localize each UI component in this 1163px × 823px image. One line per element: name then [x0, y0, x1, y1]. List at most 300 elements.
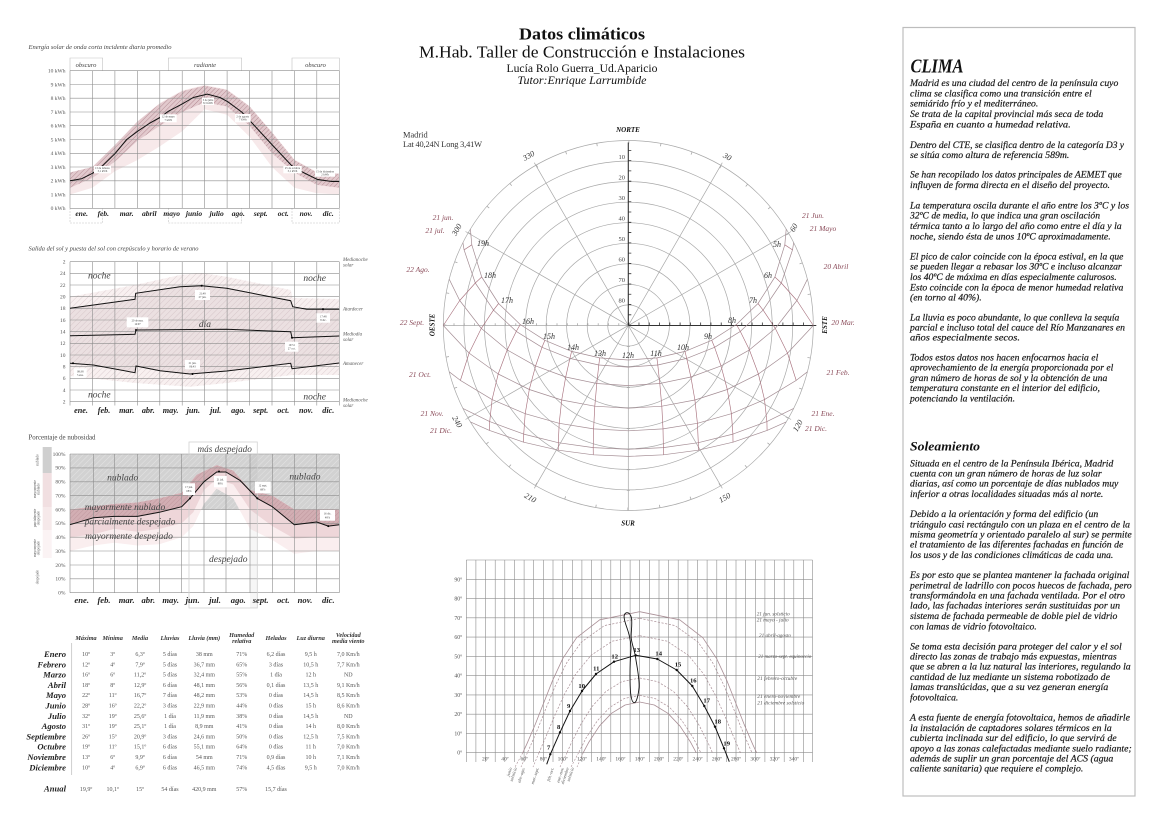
table header: Heladas: [265, 635, 287, 642]
table rows: 11 h: [306, 745, 316, 751]
text block: soleamiento: lamas translúcidas, que a su vez generan energía: [910, 682, 1109, 693]
right side labels: Medianoche: [342, 258, 368, 263]
month labels: nov.: [298, 595, 312, 605]
table rows: 19º: [109, 724, 117, 730]
region labels: mayormente despejado: [85, 532, 173, 542]
date labels: 21 Dic.: [430, 426, 452, 435]
month labels: may.: [163, 406, 179, 415]
north and east axes: [628, 142, 816, 326]
y axis labels: 40%: [55, 535, 66, 541]
table rows: 7,0 Km/h: [337, 745, 360, 751]
annual row: 15,7 días: [265, 787, 287, 793]
callouts: energy values: 3,1 kWh: [288, 170, 298, 173]
right side labels: Amanecer: [342, 362, 363, 367]
callouts: energy values: 7 kWh: [165, 119, 173, 122]
hour numbers: 10: [578, 683, 586, 690]
cloud legend bar: mayormente: [33, 480, 37, 498]
callouts: cloud percentages: 12 sept.: [258, 484, 267, 488]
altitude scale labels: 30: [618, 195, 625, 202]
date labels: [400, 211, 855, 435]
altitude labels: 20º: [454, 712, 462, 718]
cloud legend bar: [33, 447, 52, 584]
right side labels: solar: [343, 338, 353, 343]
table rows: 8º: [110, 683, 115, 689]
table rows: 16º: [109, 704, 117, 710]
table header: relativa: [232, 638, 251, 645]
rotated curve labels: diciembre: [560, 767, 570, 785]
azimuth labels: 280º: [731, 756, 741, 762]
table rows: ND: [344, 673, 353, 679]
table rows: 11,2º: [134, 673, 146, 679]
hour numbers: 14: [655, 651, 663, 658]
title block: Datos climáticos: [519, 24, 645, 44]
month labels: abril: [142, 209, 158, 218]
date labels: 22 Ago.: [406, 265, 430, 274]
table rows: 6 días: [163, 755, 178, 761]
text block: clima: se sitúa como altura de referencia 589m.: [910, 150, 1069, 161]
text block: clima: aprovechamiento de la energía proporcionada por el: [910, 363, 1114, 374]
table rows: 50%: [236, 734, 247, 740]
callouts: cloud percentages: 48%: [325, 516, 331, 520]
grid: [466, 560, 812, 762]
cardinal labels: [428, 126, 829, 528]
table rows: 6,3º: [135, 652, 145, 658]
table rows: 15º: [109, 734, 117, 740]
date legend labels: [757, 612, 811, 707]
month labels: jun.: [185, 406, 200, 415]
callouts: energy values: 15 de diciembre: [316, 170, 335, 173]
altitude labels: 50º: [454, 654, 462, 660]
table rows: 71%: [236, 652, 247, 658]
table rows: 6º: [110, 673, 115, 679]
table rows: 12,9º: [134, 683, 146, 689]
table rows: Julio: [47, 711, 66, 721]
table rows: 14 h: [305, 724, 316, 730]
y axis labels: 7 kWh: [51, 110, 66, 116]
table rows: 10 h: [305, 755, 316, 761]
table rows: Abril: [47, 680, 67, 690]
location text: [403, 130, 482, 149]
callouts: times: 06:43: [189, 366, 196, 368]
y axis labels: 5 kWh: [51, 137, 66, 143]
panel border: [903, 28, 1135, 796]
right side labels: [342, 258, 368, 409]
period boxes: obscuro, radiante: radiante: [194, 62, 216, 69]
azimuth labels: 180º: [635, 756, 645, 762]
text block: soleamiento: perimetral de ladrillo con pocos huecos de fachada, pero: [909, 580, 1132, 591]
right side labels: Mediodía: [342, 332, 363, 338]
table rows: 7,7 Km/h: [337, 662, 360, 668]
seasonal altitude curves: [523, 612, 757, 753]
callouts: cloud percentages: 21 jul.: [217, 478, 224, 482]
month labels: jul.: [208, 406, 221, 415]
month labels: oct.: [277, 595, 290, 605]
table rows: 12,5 h: [303, 734, 318, 740]
month labels: [74, 406, 334, 415]
cardinal labels: ESTE: [821, 316, 829, 335]
callouts: cloud percentages: 16 dic.: [324, 512, 332, 516]
text block: soleamiento: cubierta inclinada sur del edificio, lo que servirá de: [910, 733, 1117, 744]
table rows: Junio: [44, 700, 66, 710]
date labels: 20 Mar.: [831, 318, 855, 327]
table rows: 14,5 h: [303, 714, 318, 720]
hour dots: [549, 654, 725, 756]
rotated curve labels: solsticio: [509, 766, 518, 782]
hour labels: 11h: [650, 349, 662, 358]
table rows: 8,9 mm: [195, 724, 214, 730]
altitude labels: 10º: [454, 731, 462, 737]
date legend labels: 21 abril-agosto: [759, 633, 791, 639]
title block: Lucía Rolo Guerra_Ud.Aparicio: [506, 61, 658, 75]
month labels: feb.: [97, 595, 111, 605]
region labels: despejado: [209, 555, 248, 565]
table rows: 1 día: [164, 714, 176, 720]
table rows: 11º: [109, 693, 117, 699]
y axis labels: 10 kWh: [48, 68, 66, 74]
y axis labels: 80%: [55, 480, 66, 486]
altitude labels: 90º: [454, 577, 462, 583]
azimuth labels: 300: [449, 222, 464, 238]
sun path day curves: [443, 229, 813, 456]
azimuth labels: 240: [450, 414, 464, 429]
text block: soleamiento: el tratamiento de las diferentes fachadas en función de: [910, 540, 1124, 551]
y axis labels: 24: [60, 271, 66, 277]
altitude scale labels: 40: [618, 216, 625, 222]
table rows: 53%: [236, 693, 247, 699]
y axis labels: 0 kWh: [51, 206, 66, 212]
panel: text column: [903, 28, 1135, 796]
text block: clima: térmica tanto a lo largo del año como entre el día y la: [910, 221, 1122, 232]
callouts: cloud percentages: 68%: [186, 490, 192, 493]
azimuth labels: 260º: [712, 756, 722, 762]
cloud legend bar: parcialmente: [33, 508, 37, 527]
text block: soleamiento: cantidad de luz mediante un sistema robotizado de: [910, 672, 1111, 683]
annual row: 54 días: [161, 787, 179, 793]
altitude labels: 40º: [454, 674, 462, 680]
table rows: 0 días: [269, 745, 284, 751]
table rows: 8,0 Km/h: [337, 724, 360, 730]
altitude labels: 70º: [454, 616, 462, 622]
text block: clima: La lluvia es poco abundante, lo que conlleva la sequía: [909, 312, 1119, 323]
y axis labels: [60, 260, 66, 406]
cloud legend bar: mayormente: [33, 539, 37, 557]
azimuth labels: 20º: [482, 756, 489, 762]
altitude scale labels: [618, 154, 625, 304]
table rows: 3 días: [163, 734, 178, 740]
panel: climate data table: [26, 632, 365, 794]
date labels: 21 jun.: [433, 213, 454, 222]
callouts: times: 08:38: [77, 370, 84, 373]
table rows: 74%: [236, 765, 247, 771]
location text: Madrid: [403, 130, 428, 140]
date labels: 20 Abril: [824, 262, 848, 271]
text block: soleamiento: [909, 458, 1132, 775]
table rows: 26º: [82, 734, 90, 740]
date labels: 21 jul.: [425, 226, 445, 235]
text block: clima: temperatura constante en el interior del edificio,: [910, 383, 1100, 394]
table rows: 32,4 mm: [194, 673, 215, 679]
azimuth labels: 200º: [654, 756, 664, 762]
altitude scale labels: 10: [618, 154, 625, 161]
text block: clima: parcial e incluso total del cauce del Río Manzanares en: [909, 323, 1125, 334]
y axis labels: 4 kWh: [51, 151, 66, 157]
month labels: dic.: [323, 209, 334, 218]
table rows: 25,6º: [134, 714, 146, 720]
table rows: 0 días: [269, 724, 284, 730]
table rows: 7,9º: [135, 662, 145, 668]
box: mas despejado: [189, 442, 257, 608]
table rows: 3 días: [163, 704, 178, 710]
table header: [74, 632, 365, 645]
cardinal labels: OESTE: [428, 313, 436, 336]
y axis labels: 18: [60, 306, 66, 312]
region labels: [84, 472, 321, 565]
y axis labels: 30%: [55, 549, 66, 555]
curve leader lines: [515, 753, 583, 767]
table rows: 12º: [82, 662, 90, 668]
y axis labels: 2: [63, 260, 66, 266]
y axis labels: 20%: [55, 563, 66, 569]
hour numbers: 8: [557, 724, 561, 731]
annual row: 19,9º: [80, 787, 92, 793]
y axis labels: 100%: [53, 452, 66, 458]
rotated curve labels: junio: [505, 766, 513, 778]
text block: clima: 32ºC de media, lo que indica una gran oscilación: [909, 211, 1100, 222]
text block: clima: Se trata de la capital provincial más seca de toda: [910, 109, 1104, 120]
text block: clima: clima se clasifica como una transición entre el: [910, 88, 1092, 99]
table rows: 38%: [236, 714, 247, 720]
table rows: 10º: [82, 652, 90, 658]
table rows: 54 mm: [196, 755, 213, 761]
azimuth labels: 210: [523, 491, 538, 505]
table rows: Diciembre: [28, 762, 66, 772]
table rows: 7,1 Km/h: [337, 755, 360, 761]
text block: clima: los 40ºC de máxima en días especialmente calurosos.: [910, 272, 1117, 283]
callouts: energy values: 7 kWh: [239, 119, 247, 122]
text block: clima: Se han recopilado los datos principales de AEMET que: [910, 170, 1122, 181]
callouts: times: 10:51: [289, 344, 295, 347]
altitude labels: 60º: [454, 635, 462, 641]
table rows: 5 días: [163, 652, 178, 658]
annual row: 10,1º: [107, 787, 119, 793]
rotated curve labels: ene.-nov.: [555, 767, 565, 783]
table rows: 14,5 h: [303, 693, 318, 699]
chart title: solar energy: Energía solar de onda corta incidente diaria promedio: [27, 45, 172, 51]
table rows: 55%: [236, 673, 247, 679]
table rows: 7,0 Km/h: [337, 652, 360, 658]
text block: soleamiento: misma geometría y orientado paralelo al sur) se permite: [910, 529, 1132, 540]
callouts: times: 14:07: [134, 323, 141, 326]
month labels: feb.: [98, 406, 110, 415]
table rows: 64%: [236, 745, 247, 751]
location text: Lat 40,24N Long 3,41W: [403, 140, 482, 149]
text block: soleamiento: triángulo casi rectángulo con un plaza en el centro de la: [910, 519, 1130, 530]
date labels: 21 Oct.: [409, 370, 431, 379]
text block: clima: (en torno al 40%).: [910, 293, 982, 304]
month labels: ago.: [231, 595, 246, 605]
region labels: noche, dia: [88, 272, 326, 402]
altitude labels: 0º: [457, 751, 462, 757]
text block: clima: gran número de horas de sol y la obtención de una: [910, 373, 1107, 384]
text block: soleamiento: Se toma esta decisión para proteger del calor y el sol: [910, 641, 1122, 652]
y axis labels: 10%: [55, 577, 66, 583]
table rows: 32º: [82, 714, 90, 720]
hour numbers: 16: [690, 678, 697, 685]
text block: clima: se pueden llegar a rebasar los 30ºC e incluso alcanzar: [910, 262, 1122, 273]
chart title: cloud cover: Porcentaje de nubosidad: [28, 434, 96, 442]
text block: soleamiento: caliente sanitaria) que requiere el complejo.: [910, 764, 1083, 775]
text block: soleamiento: además de suplir un gran porcentaje del ACS (agua: [910, 753, 1113, 764]
date labels: 21 Dic.: [805, 424, 827, 433]
month labels: mayo: [163, 209, 180, 218]
title block: [419, 24, 745, 87]
hour labels: 15h: [543, 332, 555, 341]
table rows: 0 días: [269, 734, 284, 740]
text block: clima: España en cuanto a humedad relativa.: [909, 119, 1071, 130]
azimuth labels: 30: [721, 150, 733, 163]
table rows: 9,9º: [135, 755, 145, 761]
panel: polar sun path chart: [400, 126, 855, 528]
azimuth labels: 120º: [577, 756, 587, 762]
text block: soleamiento: Situada en el centro de la Península Ibérica, Madrid: [910, 458, 1114, 469]
y axis labels: 22: [60, 283, 66, 289]
annual row: 420,9 mm: [192, 787, 217, 793]
y axis labels: 1 kWh: [51, 192, 66, 198]
month labels: dic.: [322, 595, 335, 605]
table rows: Noviembre: [26, 752, 66, 762]
table rows: 16º: [82, 673, 90, 679]
table rows: Enero: [43, 649, 66, 659]
text block: soleamiento: Es por esto que se plantea mantener la fachada original: [909, 570, 1130, 581]
callouts: cloud percentages: 88%: [218, 482, 224, 486]
table header: media viento: [332, 638, 365, 645]
month labels: mar.: [119, 406, 134, 415]
region labels: noche, dia: noche: [88, 272, 111, 282]
table header: Humedad: [228, 632, 255, 639]
cloud legend bar: despejado: [36, 570, 40, 584]
table header: Media: [131, 635, 148, 642]
y axis labels: 14: [60, 330, 66, 336]
callouts: times: 27 jun.: [199, 296, 207, 299]
box: mas despejado: más despejado: [198, 444, 252, 454]
date legend labels: 21 diciembre solsticio: [757, 701, 804, 707]
cardinal labels: NORTE: [615, 126, 640, 134]
callouts: times: 27 oct.: [288, 348, 296, 350]
text block: clima: Dentro del CTE, se clasifica dentro de la categoría D3 y: [909, 140, 1125, 151]
table rows: 5 días: [163, 673, 178, 679]
day band: [70, 273, 339, 387]
title block: Tutor:Enrique Larrumbide: [518, 73, 647, 87]
date labels: 21 Ene.: [812, 409, 835, 418]
text block: clima: semiárido frío y el mediterráneo.: [910, 99, 1038, 110]
table rows: 4,5 días: [267, 765, 286, 771]
hour labels: 13h: [594, 349, 606, 358]
table rows: 41%: [236, 724, 247, 730]
hour numbers: 11: [593, 666, 599, 673]
table header: Luz diurna: [296, 635, 325, 642]
twilight band: [70, 273, 339, 387]
table rows: 10,5 h: [303, 662, 318, 668]
hour numbers: 13: [633, 647, 641, 654]
region labels: nublado: [107, 474, 139, 484]
table rows: 6 días: [163, 745, 178, 751]
table rows: 13º: [82, 755, 90, 761]
date legend labels: 21 mayo - julio: [757, 618, 789, 624]
solar noon curve: [70, 329, 339, 338]
hour labels: 14h: [567, 343, 579, 352]
cloud legend bar: despejado: [36, 541, 40, 555]
right side labels: solar: [343, 404, 353, 409]
azimuth labels: 240º: [693, 756, 703, 762]
annual row: 57%: [236, 787, 247, 793]
date labels: 21 Nov.: [421, 409, 444, 418]
cloud cover curve: [70, 472, 339, 526]
table rows: 6 días: [163, 765, 178, 771]
y axis labels: 20: [60, 294, 66, 300]
month labels: nov.: [300, 209, 313, 218]
callouts: energy values: 13 de febrero: [95, 167, 111, 170]
table rows: 10º: [82, 765, 90, 771]
azimuth labels: 160º: [615, 756, 626, 762]
annual row: [43, 784, 287, 794]
table rows: [26, 649, 360, 772]
text block: clima: Esto coincide con la época de menor humedad relativa: [909, 282, 1124, 293]
panel: solar elevation chart: [454, 560, 812, 785]
text block: clima: noche, siendo ésta de unos 10ºC aproximadamente.: [910, 231, 1111, 242]
month labels: ago.: [232, 209, 245, 218]
callouts: energy values: 2 de agosto: [236, 115, 250, 118]
table rows: 6 días: [163, 683, 178, 689]
month labels: sept.: [253, 209, 268, 218]
month labels: mar.: [119, 595, 135, 605]
table rows: Octubre: [37, 742, 66, 752]
text block: clima: Todos estos datos nos hacen enfocarnos hacia el: [910, 352, 1099, 363]
table rows: 55,1 mm: [194, 745, 215, 751]
table rows: 4º: [110, 662, 115, 668]
region labels: noche, dia: día: [199, 320, 211, 330]
y axis labels: 6 kWh: [51, 124, 66, 130]
callouts: energy values: [94, 98, 335, 177]
month labels: dic.: [322, 406, 334, 415]
y axis labels: [48, 68, 66, 212]
cloudy region: [70, 454, 339, 510]
y axis labels: 0%: [58, 590, 66, 596]
text block: clima: influyen de forma directa en el diseño del proyecto.: [910, 180, 1110, 191]
azimuth labels: 330: [520, 149, 536, 163]
region labels: noche, dia: noche: [88, 390, 111, 400]
text block: clima: La temperatura oscila durante el año entre los 3ºC y los: [909, 200, 1129, 211]
cloud legend bar: nublado: [36, 454, 40, 466]
average energy curve: [70, 94, 339, 182]
table rows: Febrero: [36, 659, 66, 669]
text block: soleamiento: transformándola en una fachada ventilada. Por el otro: [910, 591, 1125, 602]
month labels: [74, 595, 335, 605]
equinox curve: [547, 655, 729, 764]
hour labels: 17h: [501, 296, 513, 305]
callouts: times: 5 ene.: [77, 374, 84, 377]
table rows: 7,5 Km/h: [337, 734, 360, 740]
hour numbers: 12: [611, 653, 619, 660]
altitude scale labels: 70: [618, 277, 625, 284]
month labels: ene.: [74, 595, 89, 605]
altitude scale labels: 50: [618, 236, 625, 243]
callouts: energy values: 5 de julio: [203, 99, 214, 102]
callouts: energy values: 8,3 kWh: [203, 102, 213, 105]
date labels: 22 Sept.: [400, 318, 424, 327]
period boxes: obscuro, radiante: [70, 58, 339, 223]
date labels: 21 Feb.: [827, 368, 850, 377]
rotated curve labels: [505, 766, 575, 785]
